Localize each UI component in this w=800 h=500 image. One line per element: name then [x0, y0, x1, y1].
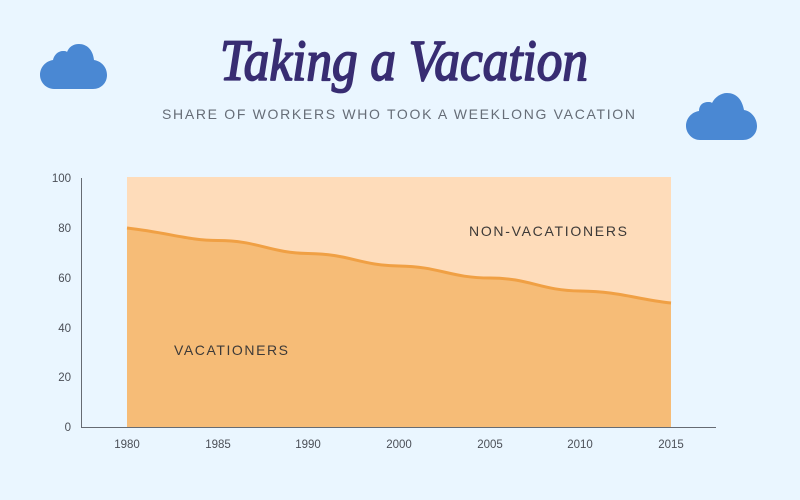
- x axis labels: 1980: [114, 439, 140, 451]
- label: non-vacationers: NON-VACATIONERS: [469, 223, 627, 239]
- x axis labels: 2005: [477, 439, 503, 451]
- icon: left cloud: [40, 44, 107, 89]
- title: Taking a Vacation: [220, 28, 588, 93]
- x axis labels: [114, 439, 684, 451]
- y axis labels: 100: [52, 173, 71, 185]
- label: vacationers: VACATIONERS: [174, 342, 288, 358]
- subtitle: SHARE OF WORKERS WHO TOOK A WEEKLONG VACATION: [162, 106, 635, 122]
- area chart: [52, 173, 716, 451]
- y axis labels: 80: [58, 223, 71, 235]
- area: vacationers: [127, 228, 671, 427]
- x axis labels: 2000: [386, 439, 412, 451]
- y axis labels: 60: [58, 273, 71, 285]
- icon: right cloud: [686, 93, 757, 140]
- y axis labels: 0: [65, 422, 71, 434]
- area: non-vacationers: [127, 177, 671, 427]
- x axis: [81, 426, 716, 428]
- line: vacationers share: [127, 228, 671, 303]
- x axis labels: 2015: [658, 439, 684, 451]
- y axis labels: 40: [58, 323, 71, 335]
- x axis labels: 1985: [205, 439, 231, 451]
- y axis labels: 20: [58, 372, 71, 384]
- x axis labels: 1990: [295, 439, 321, 451]
- y axis: [80, 178, 82, 428]
- x axis labels: 2010: [567, 439, 593, 451]
- y axis labels: [52, 173, 71, 434]
